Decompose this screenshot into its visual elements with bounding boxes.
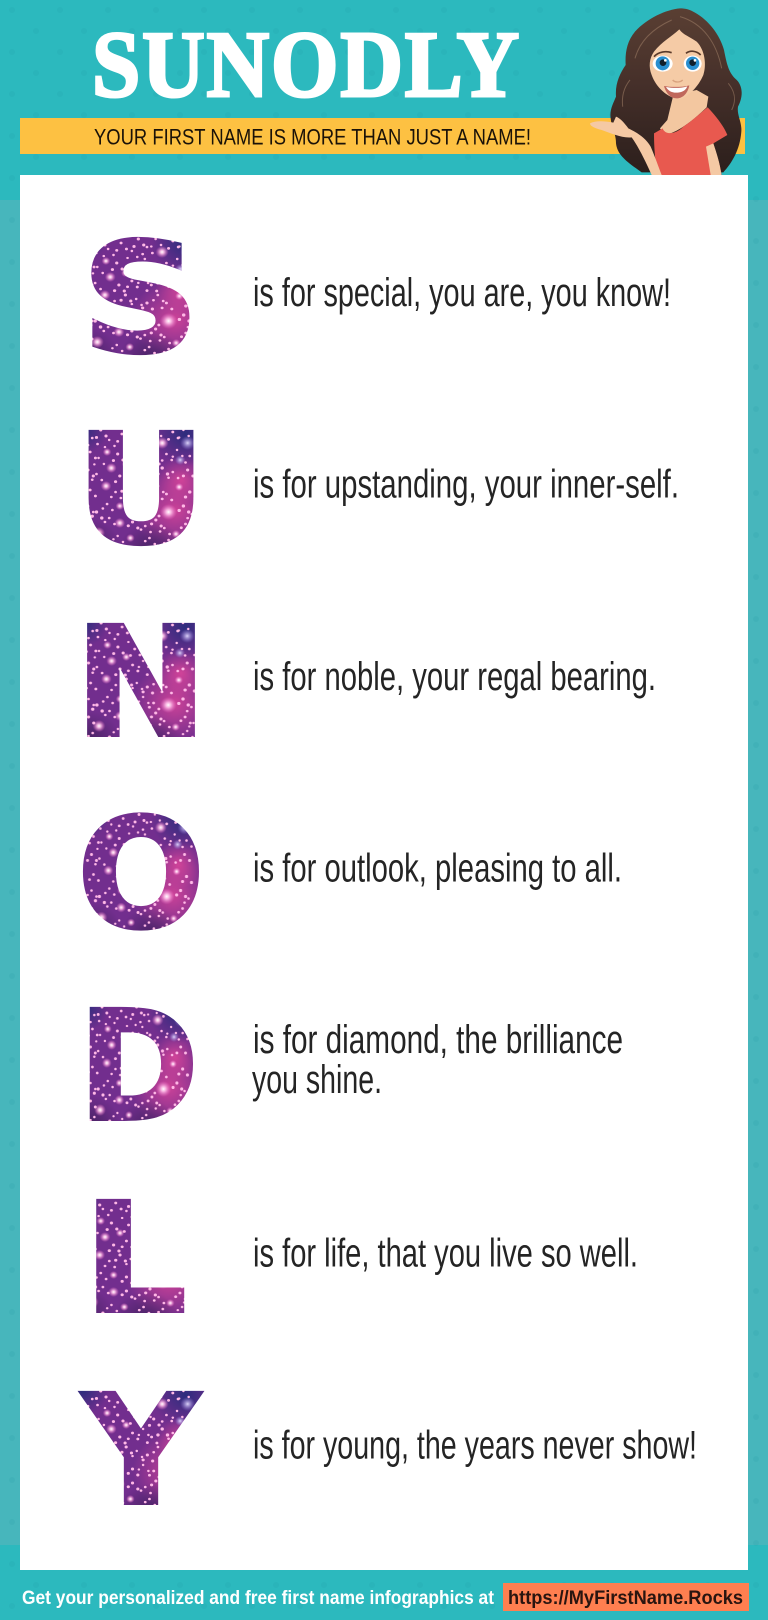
letter D: D	[78, 979, 199, 1155]
row D	[78, 979, 623, 1155]
row Y	[81, 1363, 697, 1539]
letter U: U	[76, 402, 206, 578]
letter N: N	[75, 595, 207, 771]
row O	[77, 788, 622, 963]
tagline banner	[20, 118, 745, 154]
tagline banner: YOUR FIRST NAME IS MORE THAN JUST A NAME!	[94, 124, 531, 150]
face	[650, 29, 705, 99]
text: O line: is for outlook, pleasing to all.	[253, 846, 622, 890]
nose	[673, 80, 683, 82]
smile	[664, 85, 689, 98]
hair highlights	[622, 17, 735, 110]
footer text: Get your personalized and free first name infographics at	[22, 1587, 494, 1609]
letter O: O	[77, 788, 205, 963]
letter S: S	[82, 212, 199, 388]
footer url badge: https://MyFirstName.Rocks	[508, 1587, 743, 1609]
hair	[610, 8, 742, 172]
title: SUNODLY	[92, 13, 521, 117]
eyes	[653, 56, 702, 72]
illustration: smiling woman with open hand	[590, 8, 742, 175]
neck and chest	[660, 90, 708, 135]
letter Y: Y	[81, 1363, 201, 1539]
row L	[84, 1171, 638, 1347]
letter L: L	[84, 1171, 186, 1347]
text: D lines	[252, 1018, 623, 1102]
eyebrows	[654, 51, 701, 57]
row U	[76, 402, 679, 578]
text: D lines: you shine.	[252, 1058, 382, 1102]
arm and open hand	[590, 117, 662, 175]
text: L line: is for life, that you live so well.	[253, 1232, 638, 1276]
row S	[82, 212, 671, 388]
shirt	[654, 107, 727, 175]
row N	[75, 595, 656, 771]
text: D lines: is for diamond, the brilliance	[253, 1018, 623, 1062]
footer	[22, 1583, 749, 1611]
right sleeve arm	[706, 143, 721, 175]
